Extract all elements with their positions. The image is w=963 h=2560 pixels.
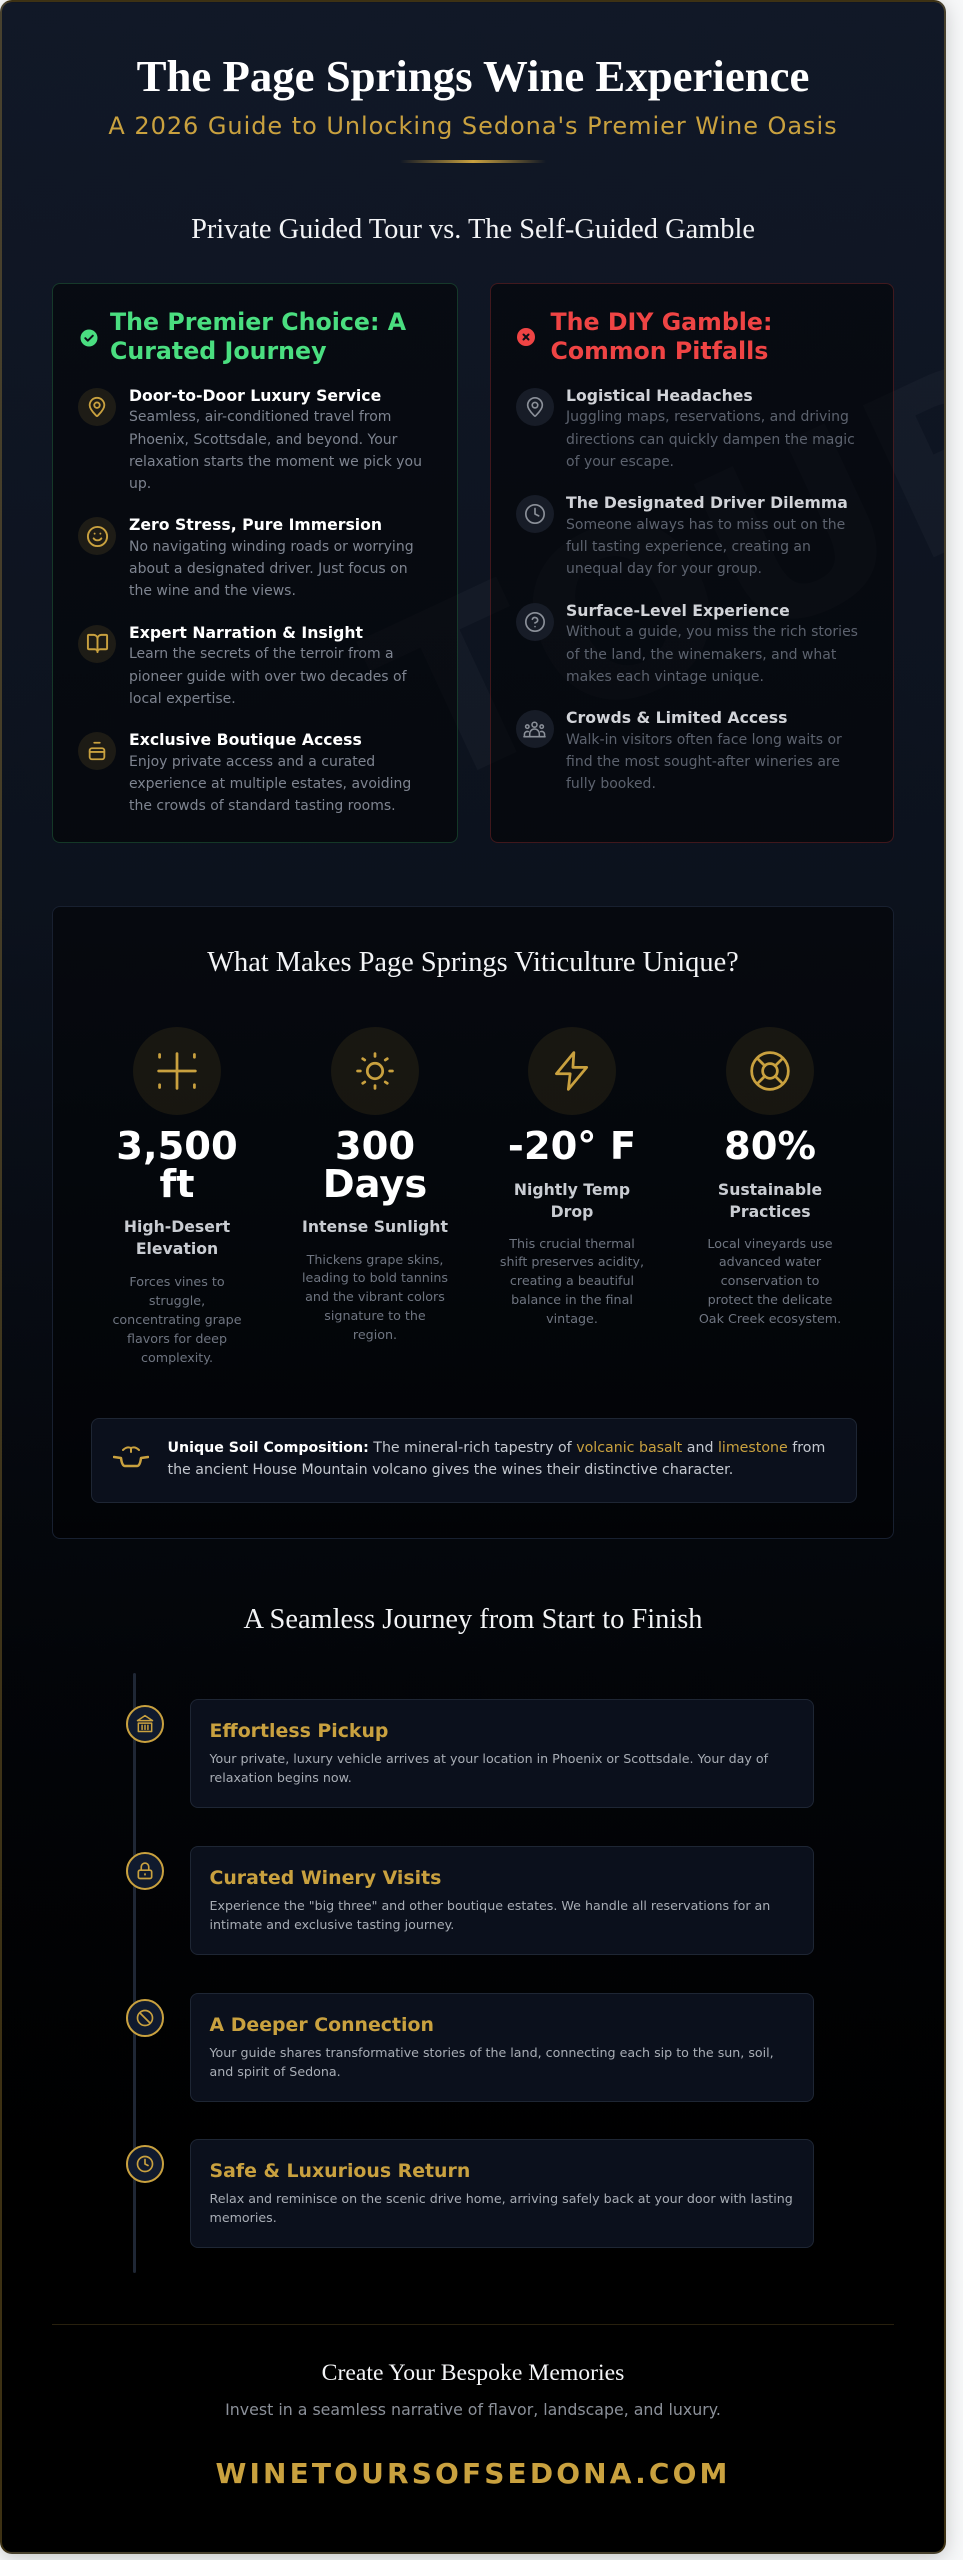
- stat: elevation: [112, 1027, 242, 1365]
- item: crowds: Crowds & Limited Access: [566, 708, 787, 727]
- stat: sunlight: Intense Sunlight: [302, 1217, 448, 1236]
- icon: lightning bolt: [528, 1026, 616, 1114]
- icon: clock: [516, 495, 554, 533]
- icon: sun: [331, 1026, 419, 1114]
- item: zero stress: [78, 515, 414, 599]
- stat: elevation: concentrating grape: [112, 1312, 242, 1327]
- timeline line: [133, 1673, 136, 2273]
- stat: sustainable: Sustainable: [718, 1180, 822, 1199]
- stat: sunlight: and the vibrant colors: [305, 1289, 445, 1304]
- item: crowds: Walk-in visitors often face long waits or: [566, 732, 842, 748]
- panel heading: The Premier Choice: A: [110, 308, 406, 336]
- stat: sunlight: signature to the: [324, 1308, 426, 1323]
- item: boutique access: Enjoy private access and a curated: [129, 754, 375, 770]
- panel heading: [110, 308, 406, 365]
- stat: sustainable: advanced water: [719, 1254, 821, 1269]
- card: winery visits: Experience the "big three" and other boutique estates. We handle all reservations for an: [210, 1898, 770, 1913]
- card: return: Relax and reminisce on the scenic drive home, arriving safely back at your door with lasting: [210, 2191, 793, 2206]
- card: connection: and spirit of Sedona.: [210, 2064, 341, 2078]
- card: return: [190, 2139, 814, 2248]
- stat: sustainable: protect the delicate: [708, 1292, 832, 1307]
- soil text: [168, 1440, 825, 1478]
- stat: sustainable: [699, 1027, 841, 1326]
- gold divider: [400, 160, 546, 162]
- item: designated driver: full tasting experience, creating an: [566, 539, 811, 555]
- icon: smile: [78, 517, 116, 555]
- icon: lock: [126, 1852, 164, 1890]
- panel heading: [550, 308, 772, 365]
- item: expert narration: Expert Narration & Insight: [129, 622, 363, 642]
- item: surface-level: [516, 600, 858, 685]
- item: logistical headaches: directions can quickly dampen the magic: [566, 432, 855, 448]
- item: door to door: [78, 386, 422, 492]
- icon: crosshair grid: [133, 1026, 221, 1114]
- stat: sustainable: 80%: [724, 1124, 816, 1168]
- card: pickup: relaxation begins now.: [210, 1770, 352, 1785]
- card: pickup: Your private, luxury vehicle arrives at your location in Phoenix or Scottsdale. Your day of: [210, 1751, 768, 1766]
- stat: sunlight: 300: [335, 1124, 415, 1168]
- item: boutique access: [78, 730, 411, 814]
- item: surface-level: of the land, the winemakers, and what: [566, 646, 836, 662]
- item: logistical headaches: Logistical Headaches: [566, 386, 753, 404]
- panel: viticulture: [52, 906, 894, 1539]
- icon: open book: [78, 624, 116, 662]
- soil text: Unique Soil Composition: The mineral-rich tapestry of volcanic basalt and limestone from: [168, 1440, 825, 1456]
- icon: boutique box: [78, 732, 116, 770]
- item: crowds: [516, 708, 842, 792]
- stat: elevation: Elevation: [136, 1239, 218, 1258]
- item: door to door: up.: [129, 476, 151, 492]
- stat: temperature drop: vintage.: [546, 1311, 598, 1326]
- icon: clock: [126, 2145, 164, 2183]
- stat: elevation: complexity.: [141, 1350, 213, 1365]
- item: door to door: Phoenix, Scottsdale, and beyond. Your: [129, 432, 397, 448]
- card: return: memories.: [210, 2210, 277, 2225]
- card: winery visits: Curated Winery Visits: [210, 1867, 441, 1889]
- card: return: Safe & Luxurious Return: [210, 2160, 470, 2182]
- panel heading: The DIY Gamble:: [550, 308, 772, 336]
- step: return: [126, 2139, 814, 2248]
- soil text: the ancient House Mountain volcano gives the wines their distinctive character.: [168, 1462, 733, 1478]
- heading: comparison: Private Guided Tour vs. The Self-Guided Gamble: [191, 214, 755, 245]
- step: pickup: [126, 1699, 814, 1808]
- stat: temperature drop: balance in the final: [511, 1292, 633, 1307]
- item: designated driver: [516, 493, 848, 577]
- stat: temperature drop: [500, 1027, 644, 1326]
- icon: soil tray: [113, 1446, 149, 1468]
- stat: sunlight: leading to bold tannins: [302, 1270, 448, 1285]
- title: The Page Springs Wine Experience: [137, 51, 809, 101]
- panel: DIY gamble: [490, 283, 894, 843]
- panel heading: Curated Journey: [110, 337, 327, 365]
- item: expert narration: Learn the secrets of the terroir from a: [129, 646, 394, 662]
- heading: journey: A Seamless Journey from Start to Finish: [244, 1604, 702, 1635]
- subtitle: A 2026 Guide to Unlocking Sedona's Premier Wine Oasis: [108, 112, 838, 140]
- item: boutique access: the crowds of standard tasting rooms.: [129, 798, 396, 814]
- stat: sunlight: region.: [353, 1327, 397, 1342]
- card: connection: Your guide shares transformative stories of the land, connecting each sip to the sun, soil,: [210, 2044, 774, 2060]
- item: surface-level: Surface-Level Experience: [566, 600, 790, 620]
- heading: viticulture: What Makes Page Springs Viticulture Unique?: [207, 946, 739, 978]
- icon: question: [516, 602, 554, 640]
- item: logistical headaches: Juggling maps, reservations, and driving: [566, 409, 849, 425]
- card: winery visits: intimate and exclusive tasting journey.: [210, 1917, 454, 1932]
- item: surface-level: Without a guide, you miss the rich stories: [566, 624, 858, 640]
- item: designated driver: unequal day for your group.: [566, 561, 762, 577]
- item: door to door: relaxation starts the moment we pick you: [129, 454, 422, 470]
- stat: temperature drop: shift preserves acidity,: [500, 1254, 644, 1269]
- step: winery visits: [126, 1846, 814, 1955]
- panel heading: Common Pitfalls: [550, 337, 768, 365]
- footer: [52, 2324, 894, 2534]
- item: boutique access: experience at multiple estates, avoiding: [129, 776, 411, 792]
- step: connection: [126, 1993, 814, 2102]
- card: pickup: [190, 1699, 814, 1808]
- item: crowds: fully booked.: [566, 776, 656, 792]
- item: designated driver: The Designated Driver Dilemma: [566, 493, 848, 512]
- stat: sunlight: [302, 1027, 448, 1342]
- icon: green check: [80, 330, 98, 346]
- icon: building: [126, 1705, 164, 1743]
- item: door to door: Door-to-Door Luxury Service: [129, 386, 381, 404]
- stat: sustainable: Practices: [729, 1202, 811, 1221]
- footer text: Invest in a seamless narrative of flavor, landscape, and luxury.: [225, 2400, 721, 2419]
- card: connection: [190, 1992, 814, 2102]
- stat: temperature drop: Drop: [551, 1202, 593, 1221]
- stat: elevation: High-Desert: [124, 1217, 230, 1236]
- icon: life buoy: [726, 1026, 814, 1114]
- icon: people group: [516, 710, 554, 748]
- stat: elevation: flavors for deep: [127, 1331, 227, 1346]
- card: winery visits: [190, 1846, 814, 1955]
- icon: red cross: [517, 328, 535, 346]
- item: expert narration: [78, 622, 407, 707]
- stat: sustainable: conservation to: [721, 1273, 819, 1288]
- item: designated driver: Someone always has to miss out on the: [566, 517, 845, 533]
- stat: temperature drop: creating a beautiful: [510, 1273, 634, 1288]
- item: crowds: find the most sought-after wineries are: [566, 754, 840, 770]
- footer heading: Create Your Bespoke Memories: [322, 2360, 624, 2386]
- item: logistical headaches: [516, 386, 855, 470]
- item: door to door: Seamless, air-conditioned travel from: [129, 409, 391, 425]
- stat: elevation: struggle,: [149, 1293, 205, 1308]
- stat: sustainable: Local vineyards use: [707, 1236, 833, 1250]
- item: zero stress: about a designated driver. Just focus on: [129, 561, 408, 577]
- callout: soil composition: [91, 1418, 857, 1503]
- item: expert narration: local expertise.: [129, 691, 236, 707]
- item: logistical headaches: of your escape.: [566, 454, 674, 470]
- panel: premier choice: [52, 283, 458, 843]
- stat: temperature drop: Nightly Temp: [514, 1180, 630, 1199]
- stat: elevation: 3,500: [116, 1124, 238, 1168]
- stat: sunlight: Days: [323, 1162, 427, 1207]
- item: zero stress: Zero Stress, Pure Immersion: [129, 515, 382, 534]
- stat: sunlight: Thickens grape skins,: [307, 1252, 443, 1266]
- stat: elevation: Forces vines to: [129, 1274, 225, 1289]
- item: surface-level: makes each vintage unique.: [566, 669, 764, 685]
- stat: elevation: ft: [159, 1162, 195, 1207]
- website: WINETOURSOFSEDONA.COM: [215, 2457, 731, 2490]
- stat: temperature drop: This crucial thermal: [509, 1236, 635, 1250]
- item: zero stress: the wine and the views.: [129, 583, 296, 599]
- icon: map pin: [78, 388, 116, 426]
- item: expert narration: pioneer guide with over two decades of: [129, 668, 407, 684]
- card: connection: A Deeper Connection: [210, 2014, 434, 2036]
- card: pickup: Effortless Pickup: [210, 1720, 388, 1742]
- icon: map pin: [516, 388, 554, 426]
- stat: temperature drop: -20° F: [508, 1124, 636, 1168]
- timeline: [126, 1673, 814, 2273]
- item: zero stress: No navigating winding roads or worrying: [129, 539, 414, 555]
- item: boutique access: Exclusive Boutique Access: [129, 730, 362, 749]
- icon: ban: [126, 1999, 164, 2037]
- stat: sustainable: Oak Creek ecosystem.: [699, 1311, 841, 1326]
